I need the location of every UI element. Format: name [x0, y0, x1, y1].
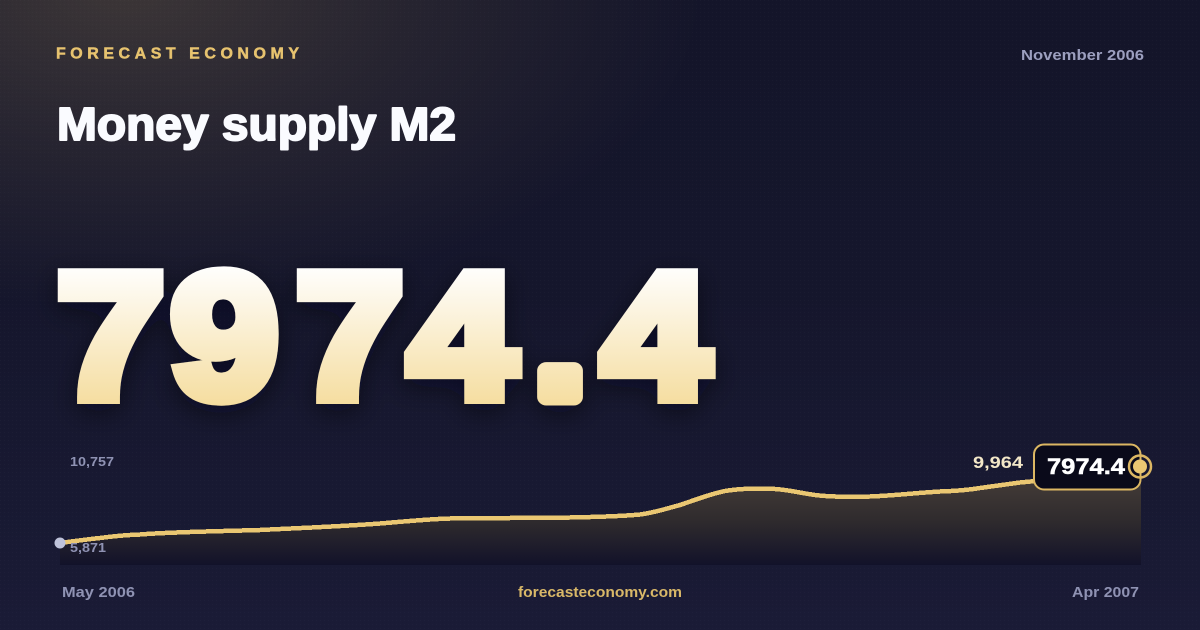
chart area fill — [60, 481, 1141, 565]
eyebrow: FORECAST ECONOMY: FORECAST ECONOMY — [56, 46, 299, 62]
current value callout: 7974.4 — [1047, 454, 1126, 479]
axis label: minimum: 5,871 — [70, 540, 106, 555]
x-axis start label: May 2006 — [62, 584, 135, 601]
axis label: maximum: 10,757 — [70, 454, 114, 469]
footer link: forecasteconomy.com — [518, 584, 682, 601]
headline value: 7974.4 — [57, 237, 709, 435]
date: November 2006: November 2006 — [1021, 47, 1144, 64]
title: Money supply M2: Money supply M2 — [57, 98, 456, 150]
area chart — [54, 481, 1141, 565]
x-axis end label: Apr 2007 — [1072, 584, 1139, 601]
current value callout — [1034, 444, 1151, 490]
start point — [54, 538, 66, 548]
current point marker — [1129, 456, 1151, 478]
peak label: 9,964 — [973, 453, 1024, 472]
chart line — [60, 481, 1036, 543]
